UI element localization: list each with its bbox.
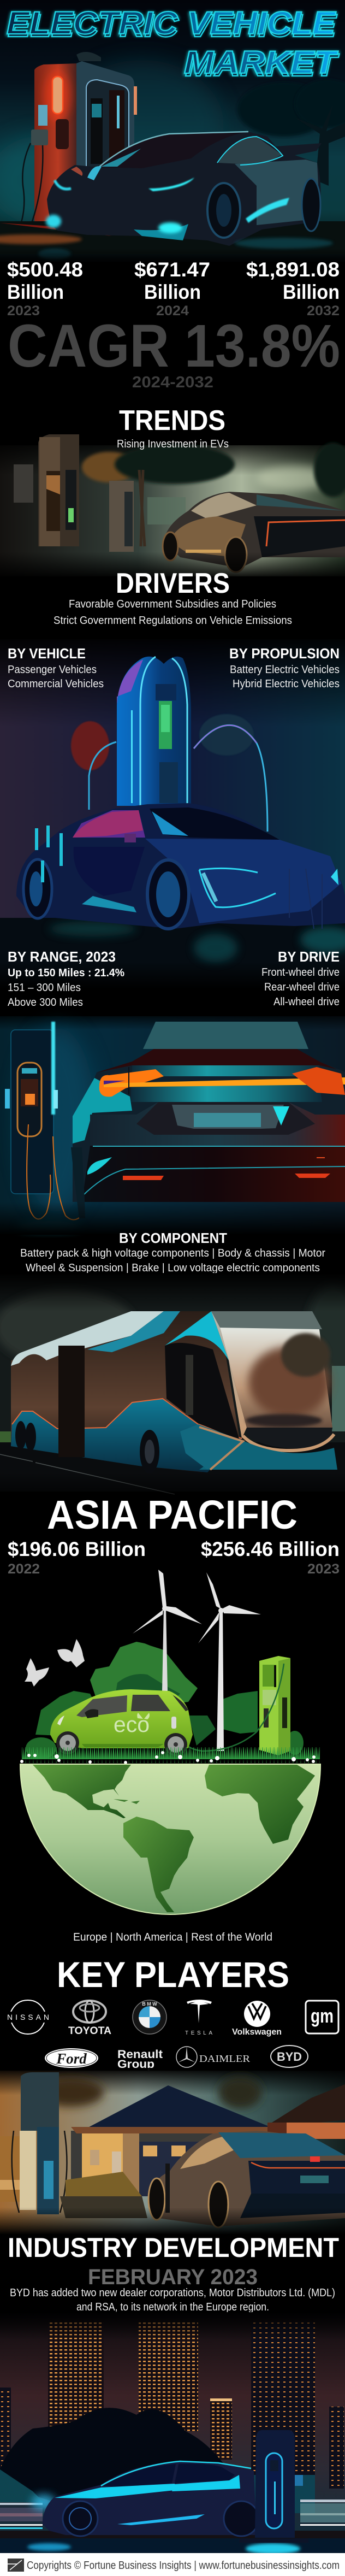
CAGR: 2024-2032 — [132, 374, 213, 391]
city and charging car illustration — [0, 2312, 345, 2554]
rear of car — [71, 1022, 345, 1218]
segment: by vehicle: Commercial Vehicles — [8, 678, 104, 690]
logo: Nissan: NISSAN — [7, 2013, 49, 2021]
logo: Daimler — [176, 2047, 250, 2067]
title: ELECTRIC VEHICLE — [7, 5, 336, 41]
trees — [26, 1642, 304, 1759]
stat: 2032: 2032 — [307, 303, 340, 319]
logo: Renault Group — [117, 2048, 163, 2071]
segment: by propulsion: Hybrid Electric Vehicles — [233, 678, 340, 690]
charger — [5, 1022, 84, 1219]
stat: 2024: $671.47 — [134, 258, 210, 281]
stat: asia pacific 2022: $196.06 Billion — [8, 1538, 146, 1560]
title: ELECTRIC VEHICLE — [8, 8, 337, 44]
segment: by component: Battery pack & high voltage components | Body & chassis | Motor — [20, 1247, 325, 1259]
stat: 2023: Billion — [7, 281, 64, 303]
wind turbines — [133, 1570, 261, 1751]
footer logo — [8, 2559, 24, 2572]
stat: asia pacific 2023 — [201, 1538, 340, 1577]
heading: trends — [117, 405, 229, 450]
segment: by range: Above 300 Miles — [8, 997, 83, 1009]
title: MARKET — [184, 46, 338, 81]
segment: by range: Up to 150 Miles : 21.4% — [8, 967, 124, 979]
footer bar — [0, 2553, 345, 2576]
butterflies — [25, 1639, 85, 1687]
charger — [16, 52, 137, 243]
segment: by component — [20, 1230, 325, 1274]
heading: trends: TRENDS — [119, 405, 225, 437]
logo: Volkswagen: Volkswagen — [232, 2027, 282, 2037]
stat: asia pacific 2023: $256.46 Billion — [201, 1538, 340, 1560]
stat: asia pacific 2022 — [8, 1538, 146, 1577]
logo: GM — [306, 2001, 338, 2033]
logo: Volkswagen — [232, 2001, 282, 2037]
eco globe illustration — [20, 1570, 320, 1914]
segment: by drive: All-wheel drive — [273, 996, 340, 1008]
segment: by component: Wheel & Suspension | Brake | Low voltage electric components — [26, 1262, 320, 1274]
bus illustration — [0, 1273, 345, 1505]
title: ELECTRIC VEHICLE — [7, 7, 336, 42]
logo: BYD: BYD — [277, 2050, 302, 2064]
segment: by drive: Front-wheel drive — [261, 966, 340, 978]
stat: 2032 — [246, 258, 340, 319]
street charger — [239, 2430, 308, 2543]
logo: BMW: B M W — [142, 2001, 157, 2007]
bus body — [11, 1311, 337, 1473]
segment: by range: BY RANGE, 2023 — [8, 948, 116, 965]
logo: Tesla: TESLA — [185, 2030, 212, 2036]
segment: by vehicle: Passenger Vehicles — [8, 664, 97, 676]
grass — [22, 1747, 320, 1763]
stat: 2024: 2024 — [156, 303, 189, 319]
stat: 2024 — [134, 258, 210, 319]
stat: 2032: Billion — [283, 281, 340, 303]
segment: by drive: BY DRIVE — [278, 948, 340, 965]
heading: industry development: FEBRUARY 2023 — [88, 2265, 258, 2289]
title — [7, 5, 340, 83]
development text: and RSA, to its network in the Europe region. — [76, 2301, 269, 2313]
logo: Toyota: TOYOTA — [68, 2025, 111, 2037]
logo: Renault Group: Group — [117, 2058, 154, 2071]
logo: Daimler: DAIMLER — [199, 2053, 250, 2064]
development text — [10, 2287, 335, 2313]
eco car: eco — [114, 1713, 150, 1737]
heading: drivers: DRIVERS — [116, 568, 230, 599]
logo: GM: gm — [311, 2005, 334, 2027]
logo: Tesla — [185, 2000, 212, 2036]
logo: Toyota — [68, 2001, 111, 2037]
heading: drivers: Strict Government Regulations on Vehicle Emissions — [53, 615, 292, 627]
segment: by component: BY COMPONENT — [119, 1230, 227, 1246]
logo: Nissan — [7, 2000, 49, 2034]
rear car illustration — [0, 1011, 345, 1235]
stat: 2023: 2023 — [7, 303, 40, 319]
heading: drivers — [53, 568, 292, 627]
stat: asia pacific 2022: 2022 — [8, 1561, 40, 1577]
segment: by propulsion: BY PROPULSION — [229, 645, 340, 662]
stat: 2032: $1,891.08 — [246, 258, 340, 281]
heading: drivers: Favorable Government Subsidies and Policies — [69, 598, 276, 610]
stat: 2023 — [7, 258, 83, 319]
tree silhouette — [237, 79, 345, 186]
logo: BMW — [133, 2000, 166, 2034]
segment: by vehicle: BY VEHICLE — [8, 645, 86, 662]
stat: 2024: Billion — [144, 281, 201, 303]
logo: Renault Group: Renault — [117, 2048, 163, 2061]
title: MARKET — [185, 48, 340, 83]
ground — [0, 221, 345, 254]
title: MARKET — [184, 45, 338, 80]
segment: by range — [8, 948, 124, 1009]
blue car — [16, 803, 345, 929]
regions: Europe | North America | Rest of the World — [73, 1931, 272, 1943]
logo: Ford: Ford — [56, 2050, 87, 2067]
eco car — [50, 1689, 193, 1756]
segment: by drive — [261, 948, 340, 1008]
globe — [20, 1764, 320, 1914]
electric car — [43, 2461, 259, 2536]
flowers — [20, 1751, 316, 1764]
heading: industry development — [8, 2232, 339, 2289]
house and car illustration — [0, 2068, 345, 2235]
segment: by range: 151 – 300 Miles — [8, 982, 81, 994]
heading: asia pacific: ASIA PACIFIC — [47, 1492, 298, 1537]
blue car and charger illustration — [0, 634, 345, 989]
hero illustration: charger and car — [0, 0, 345, 265]
heading: trends: Rising Investment in EVs — [117, 438, 229, 450]
logo: BYD — [271, 2046, 308, 2067]
charging station — [175, 1656, 290, 1755]
segment: by vehicle — [8, 645, 104, 690]
stat: 2023: $500.48 — [7, 258, 83, 281]
segment: by propulsion: Battery Electric Vehicles — [230, 664, 340, 676]
segment: by drive: Rear-wheel drive — [264, 981, 340, 993]
stat: asia pacific 2023: 2023 — [307, 1561, 340, 1577]
segment: by propulsion — [229, 645, 340, 690]
logo: Ford — [45, 2048, 98, 2068]
heading: key players: KEY PLAYERS — [57, 1954, 289, 1995]
trends illustration — [0, 434, 345, 579]
car body — [46, 132, 322, 246]
